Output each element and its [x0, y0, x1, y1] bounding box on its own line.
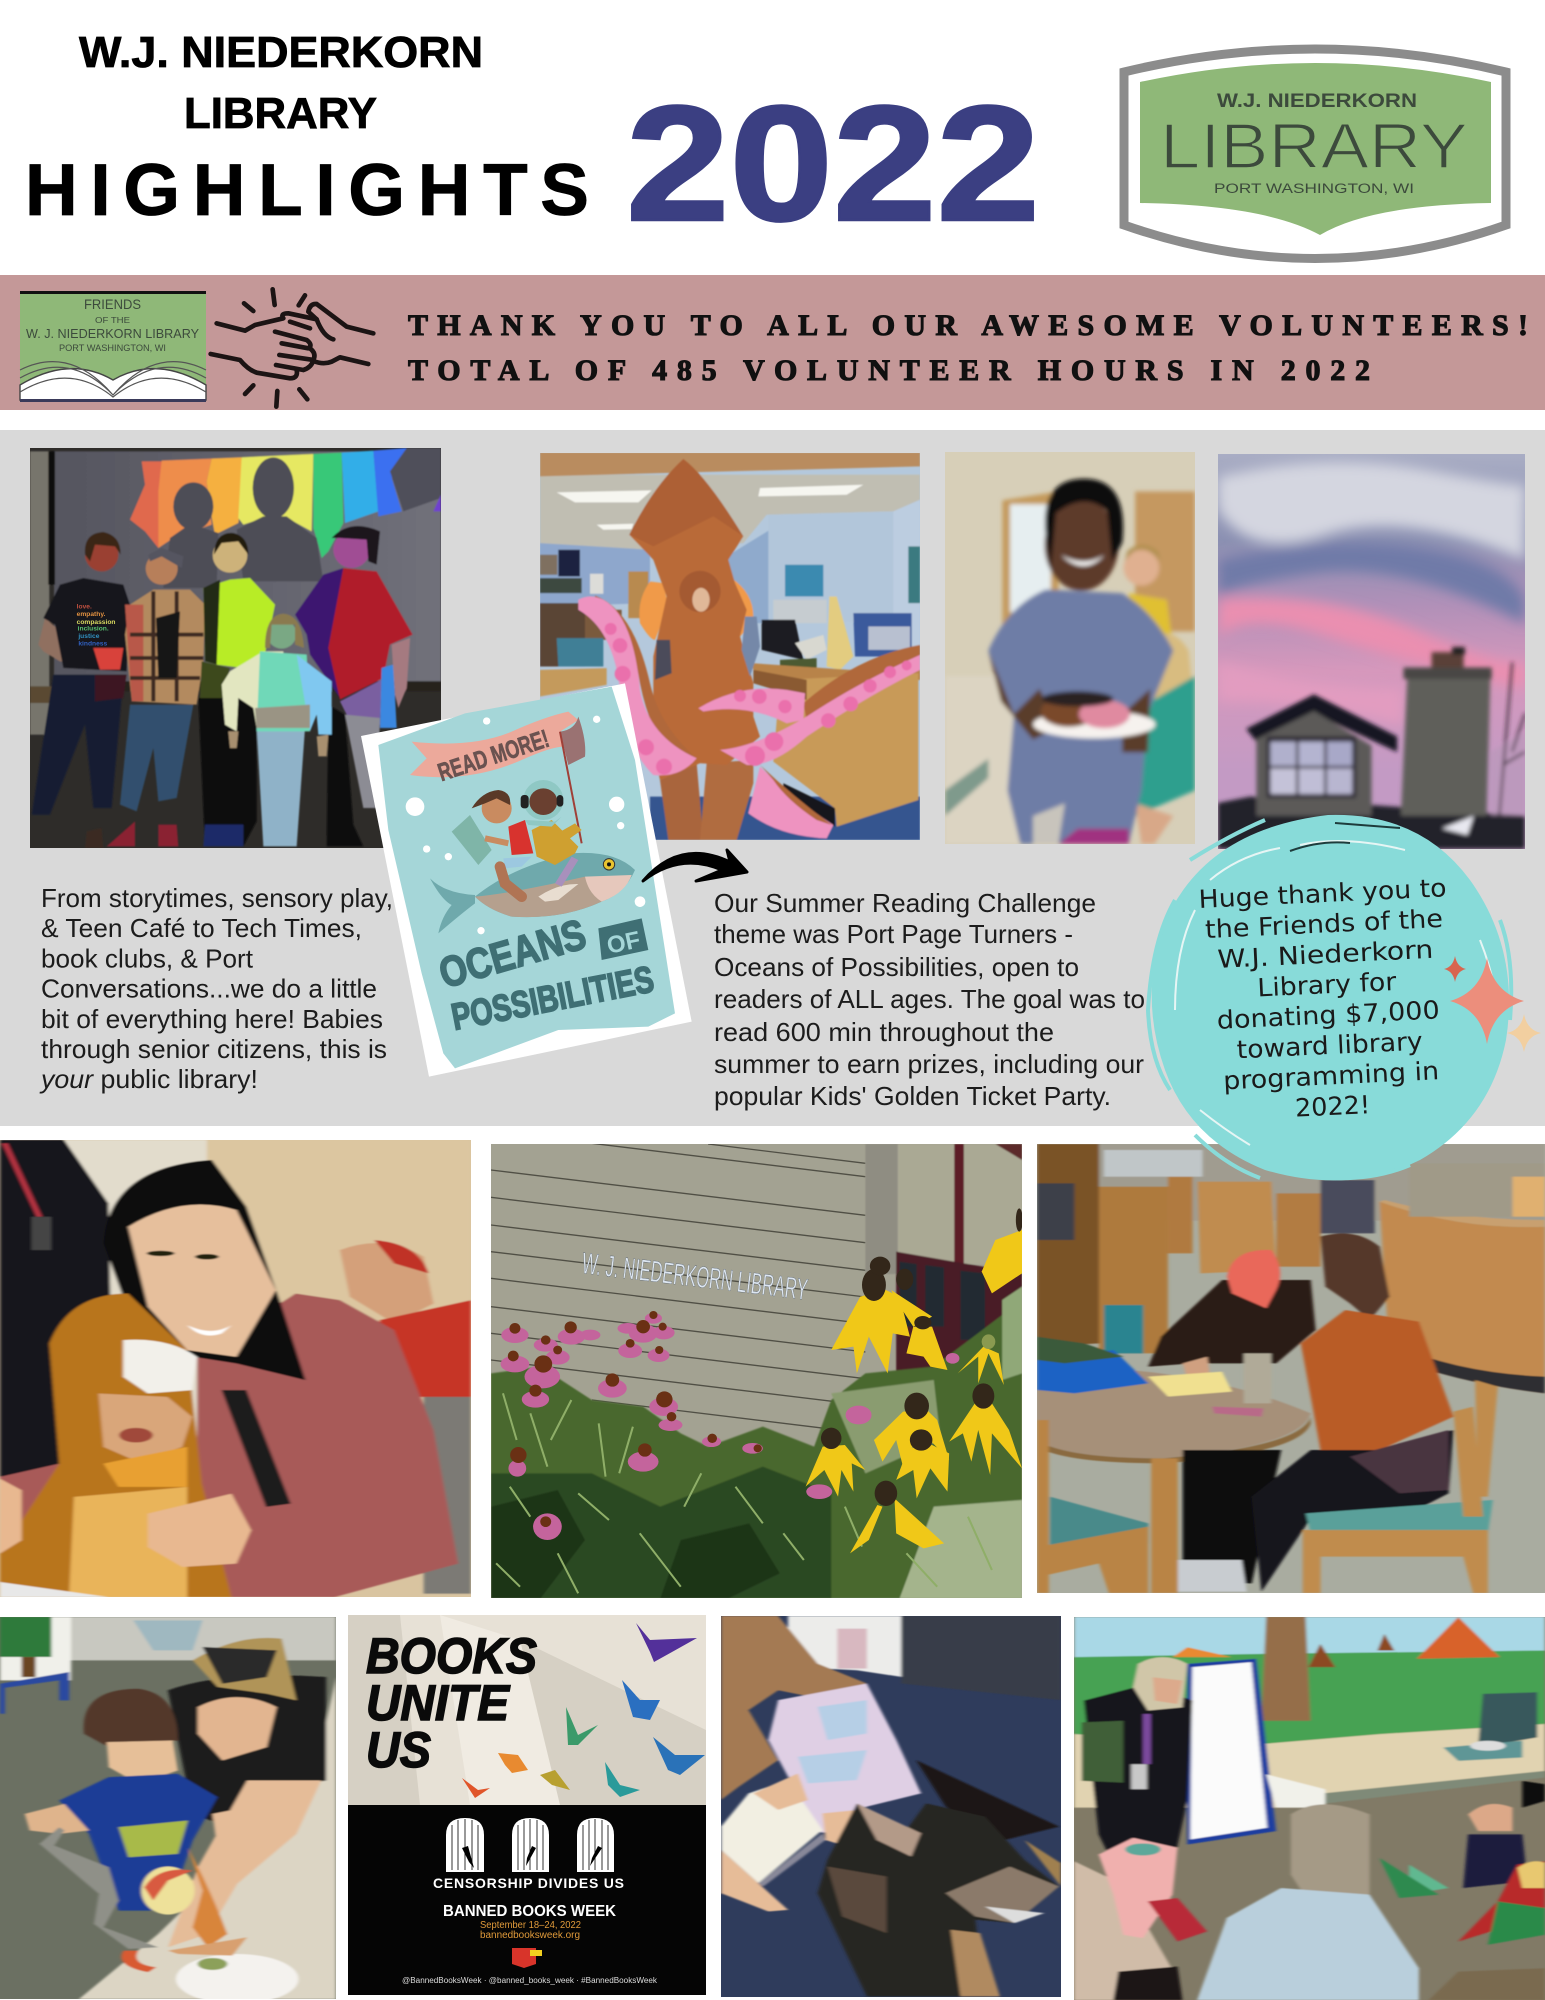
text: programs overview — [39, 883, 393, 1094]
illustration: children riding a fish — [406, 716, 645, 934]
text: programs overview: book clubs, & Port — [41, 944, 254, 974]
text: volunteer thanks: THANK YOU TO ALL OUR AWESOME VOLUNTEERS! — [408, 309, 1528, 342]
arrow: poster to summer reading text — [643, 850, 747, 881]
text: Books Unite Us: BOOKS — [366, 1628, 537, 1684]
poster: Banned Books Week — [348, 1615, 706, 1995]
panel: black censorship section — [348, 1805, 706, 1995]
text: Books Unite Us: US — [366, 1722, 431, 1778]
text: summer reading challenge: theme was Port Page Turners - — [714, 919, 1073, 949]
icon: banned books badge — [512, 1948, 542, 1968]
logo: Friends of the Library — [20, 291, 206, 402]
text: summer reading challenge: Our Summer Reading Challenge — [714, 888, 1096, 918]
text: printed T-shirt words: kindness — [78, 640, 107, 647]
logo: Friends of the Library: PORT WASHINGTON, WI — [59, 343, 166, 353]
text: printed T-shirt words — [77, 604, 116, 647]
title: W.J. Niederkorn Library Highlights: W.J. NIEDERKORN — [79, 28, 483, 77]
panel: black censorship section: bannedbooksweek.org — [480, 1930, 580, 1941]
panel: black censorship section: BANNED BOOKS WEEK — [443, 1903, 616, 1920]
panel: black censorship section: CENSORSHIP DIVIDES US — [433, 1875, 624, 1891]
heading: year 2022: 2022 — [626, 72, 1040, 255]
text: volunteer thanks: TOTAL OF 485 VOLUNTEER HOURS IN 2022 — [408, 354, 1370, 387]
text: printed T-shirt words: compassion — [77, 619, 116, 626]
banner: read more: READ MORE! — [435, 725, 553, 787]
panel: volunteer banner — [0, 275, 1545, 410]
photo: mother and child in lion costume — [0, 1140, 471, 1597]
text: programs overview: & Teen Café to Tech Times, — [41, 913, 362, 943]
text: donation message: donating $7,000 — [1216, 995, 1440, 1035]
icon: handshake — [211, 289, 373, 407]
text: donation message: Huge thank you to — [1198, 873, 1447, 914]
text: Books Unite Us — [366, 1628, 537, 1778]
panel: black censorship section: September 18–24, 2022 — [480, 1920, 581, 1931]
logo: Friends of the Library: W. J. NIEDERKORN LIBRARY — [26, 326, 199, 341]
photo: storytime with kids on the floor — [1074, 1617, 1545, 2000]
photo: library sign and coneflowers — [491, 1144, 1022, 1598]
logo: Friends of the Library: FRIENDS — [84, 296, 141, 312]
text: summer reading challenge: read 600 min throughout the — [714, 1017, 1054, 1047]
photo: tutoring at library table — [1037, 1144, 1545, 1593]
text: oceans of possibilities: POSSIBILITIES — [448, 958, 657, 1038]
logo: Friends of the Library: OF THE — [95, 316, 130, 325]
icon: flock of birds — [462, 1623, 705, 1798]
text: summer reading challenge: summer to earn prizes, including our — [714, 1049, 1144, 1079]
text: Books Unite Us: UNITE — [366, 1675, 511, 1731]
title: W.J. Niederkorn Library Highlights: HIGHLIGHTS — [25, 150, 589, 231]
poster: Oceans of Possibilities — [361, 683, 692, 1077]
text: programs overview: Conversations...we do a little — [41, 974, 377, 1004]
text: printed T-shirt words: justice — [77, 633, 100, 640]
text: summer reading challenge: popular Kids' Golden Ticket Party. — [714, 1081, 1111, 1111]
text: donation message: W.J. Niederkorn — [1217, 935, 1434, 974]
logo: W.J. Niederkorn Library badge — [1124, 49, 1506, 258]
panel: black censorship section: @BannedBooksWeek · @banned_books_week · #BannedBooksWeek — [402, 1976, 658, 1985]
text: donation message: toward library — [1236, 1027, 1423, 1064]
text: printed T-shirt words: love. — [77, 604, 92, 611]
text: donation message: Library for — [1257, 967, 1398, 1002]
photo: girl reading to a therapy dog — [721, 1616, 1061, 1997]
text: oceans of possibilities: OF — [605, 926, 643, 960]
callout: Friends donation thank you — [1148, 815, 1541, 1180]
text: programs overview: From storytimes, sensory play, — [41, 883, 393, 913]
photo: girl holding donuts — [945, 452, 1195, 844]
text: oceans of possibilities — [434, 910, 657, 1038]
text: printed T-shirt words: inclusion. — [78, 626, 109, 633]
panel: grey programs section — [0, 430, 1545, 1126]
logo: W.J. Niederkorn Library badge: PORT WASHINGTON, WI — [1214, 181, 1414, 196]
title: W.J. Niederkorn Library Highlights — [25, 28, 589, 231]
text: programs overview: through senior citizens, this is — [41, 1034, 387, 1064]
text: donation message: the Friends of the — [1204, 904, 1443, 944]
text: donation message: programming in — [1223, 1056, 1440, 1095]
text: library building sign: W. J. NIEDERKORN LIBRARY — [580, 1247, 809, 1307]
text: programs overview: bit of everything here! Babies — [41, 1004, 383, 1034]
text: summer reading challenge: Oceans of Possibilities, open to — [714, 952, 1079, 982]
text: donation message — [1198, 873, 1457, 1127]
photo: toddler using apple peeler — [0, 1617, 336, 1999]
photo: rainbow shadow group — [30, 448, 441, 848]
text: volunteer thanks — [408, 309, 1528, 387]
photo: inflatable squid costume — [540, 453, 920, 840]
logo: W.J. Niederkorn Library badge: W.J. NIEDERKORN — [1217, 91, 1417, 112]
text: programs overview: your public library! — [39, 1064, 258, 1094]
text: summer reading challenge: readers of ALL ages. The goal was to — [714, 984, 1145, 1014]
illustration: pink coneflowers — [501, 1313, 959, 1540]
text: donation message: 2022! — [1294, 1090, 1371, 1123]
title: W.J. Niederkorn Library Highlights: LIBRARY — [184, 89, 377, 138]
icon: three birdcages — [446, 1818, 614, 1872]
text: printed T-shirt words: empathy. — [77, 611, 106, 618]
illustration: yellow black-eyed flowers — [806, 1230, 1022, 1553]
banner: read more — [410, 712, 585, 843]
photo: pink sunset over library roof — [1218, 454, 1525, 849]
text: oceans of possibilities: OCEANS — [434, 910, 591, 998]
text: summer reading challenge — [714, 888, 1145, 1111]
icon: sparkle stars — [1444, 956, 1541, 1052]
logo: W.J. Niederkorn Library badge: LIBRARY — [1160, 110, 1468, 182]
